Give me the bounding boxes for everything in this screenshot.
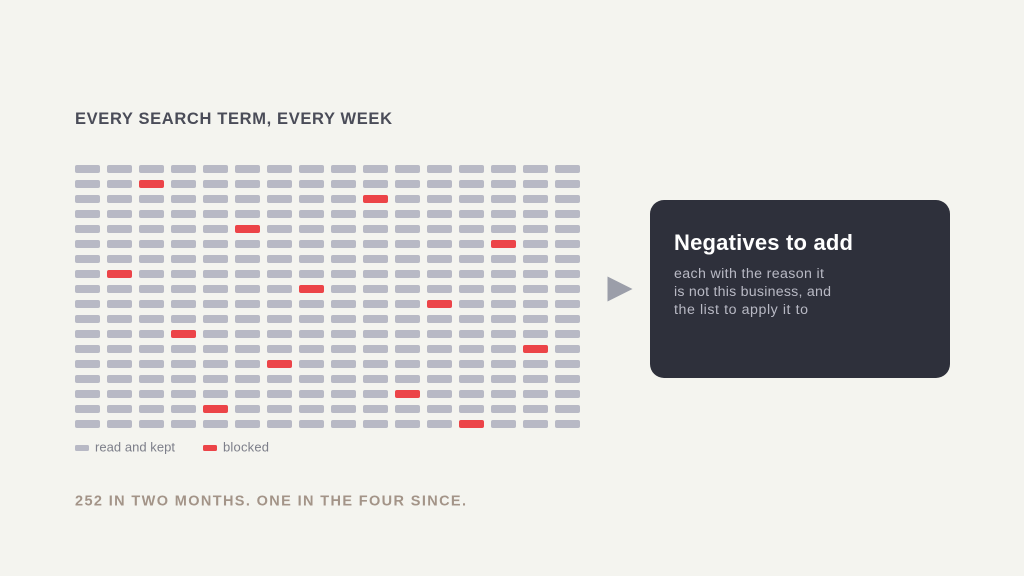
legend item: blocked: [203, 440, 269, 454]
waffle grid of search terms: [75, 165, 580, 428]
title: EVERY SEARCH TERM, EVERY WEEK: [75, 110, 392, 128]
panel body text: is not this business, and: [674, 284, 831, 300]
panel heading: Negatives to add: [674, 230, 853, 255]
panel body text: each with the reason it: [674, 266, 824, 282]
legend: [75, 440, 269, 454]
legend item: blocked: blocked: [223, 440, 269, 454]
footer statement: 252 IN TWO MONTHS. ONE IN THE FOUR SINCE.: [75, 494, 466, 510]
panel: negatives to add: [650, 200, 950, 378]
arrow: [608, 276, 632, 302]
legend item: read and kept: read and kept: [95, 440, 175, 454]
panel body text: [674, 266, 831, 318]
panel body text: the list to apply it to: [674, 302, 808, 318]
